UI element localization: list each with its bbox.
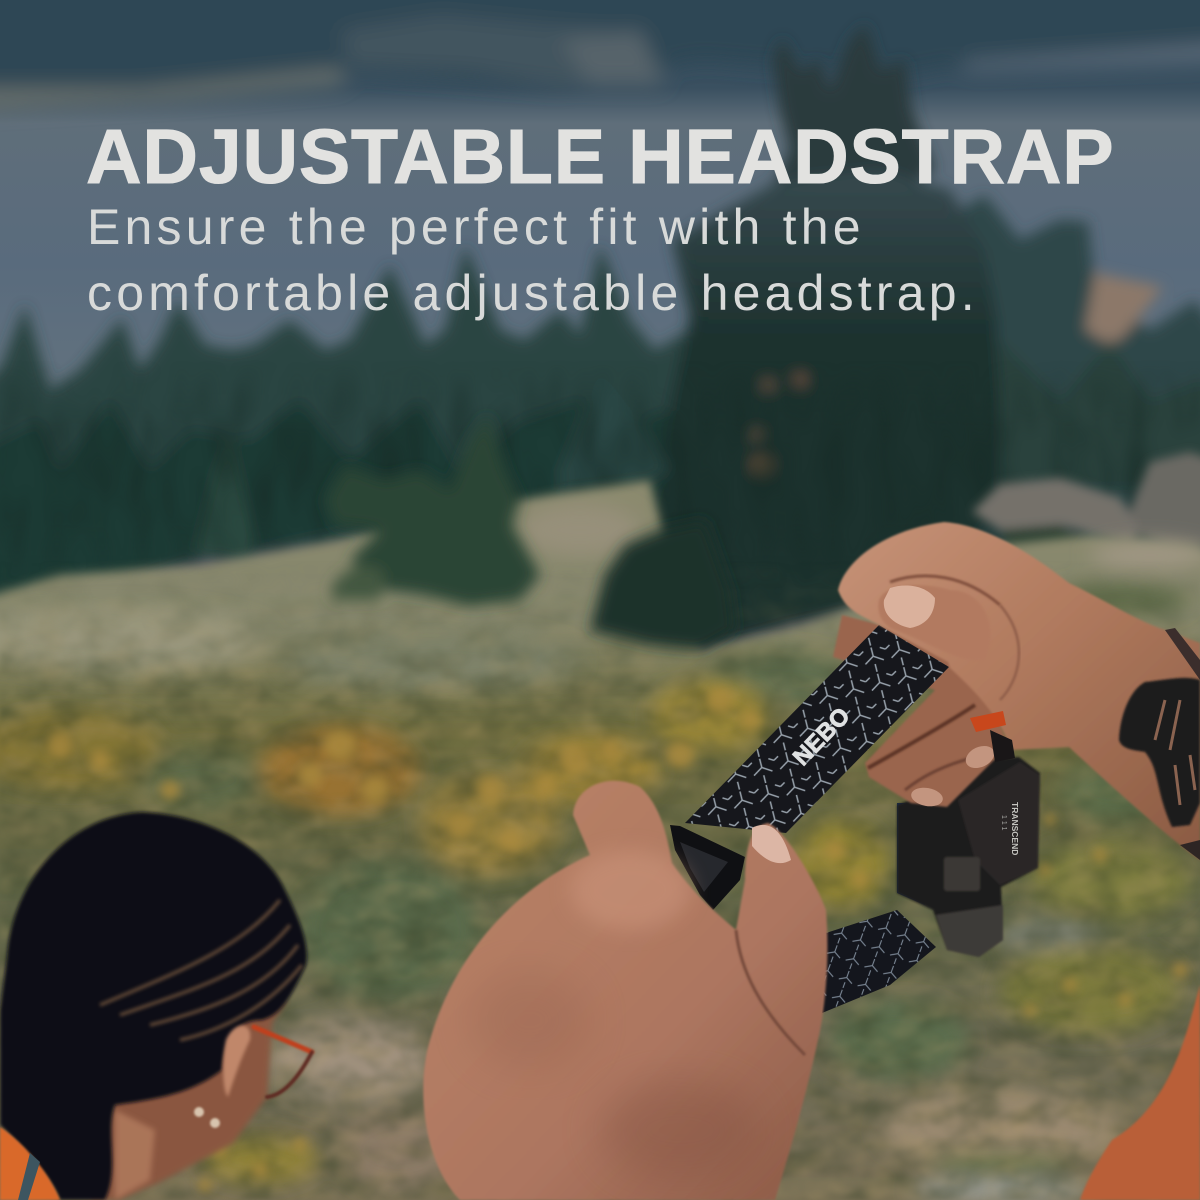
strap buckle [670,825,745,910]
skin [90,1000,287,1200]
orange clip [970,711,1006,732]
left hand (foreground) [423,781,827,1200]
ear [223,1026,250,1097]
lower strap behind [822,910,936,1013]
upper strap with NEBO logo [670,625,949,910]
headlamp label: 1 1 1 [1000,815,1007,831]
headlamp label: TRANSCEND [1010,802,1020,855]
subtitle: Ensure the perfect fit with the [87,199,865,255]
distant rocks on right [972,452,1200,570]
back of hand [838,522,1200,860]
thumb [878,585,991,661]
subtitle [87,199,979,321]
headlamp [897,757,1040,957]
meadow [0,415,1200,1200]
foreground conifers and bushes [325,415,735,650]
tree texture [46,384,1146,536]
tree line [0,24,1200,650]
orange jacket [0,1127,60,1200]
hand creases [890,576,1000,605]
woman's head [0,812,312,1200]
thumbnail [884,585,935,628]
tattoo [1119,678,1200,827]
lower fingers of right hand [833,615,1010,807]
meadow patches [0,504,1200,1200]
lake [0,0,1200,440]
distant hills [0,0,1200,112]
orange sleeve [1080,985,1200,1200]
earring [194,1107,220,1128]
right hand [838,522,1200,860]
headlamp label [1000,802,1020,855]
title: ADJUSTABLE HEADSTRAP [86,114,1114,200]
upper strap with NEBO logo: NEBO [788,703,855,771]
fingernails [910,785,944,809]
glasses [254,1027,312,1097]
hair strands [100,900,302,1040]
knuckle shading [470,970,590,1070]
hair [0,812,307,1200]
subtitle: comfortable adjustable headstrap. [87,265,979,321]
yellow flower blobs [47,687,1188,1192]
meadow texture [0,540,1200,1200]
thumbnail [752,825,791,863]
